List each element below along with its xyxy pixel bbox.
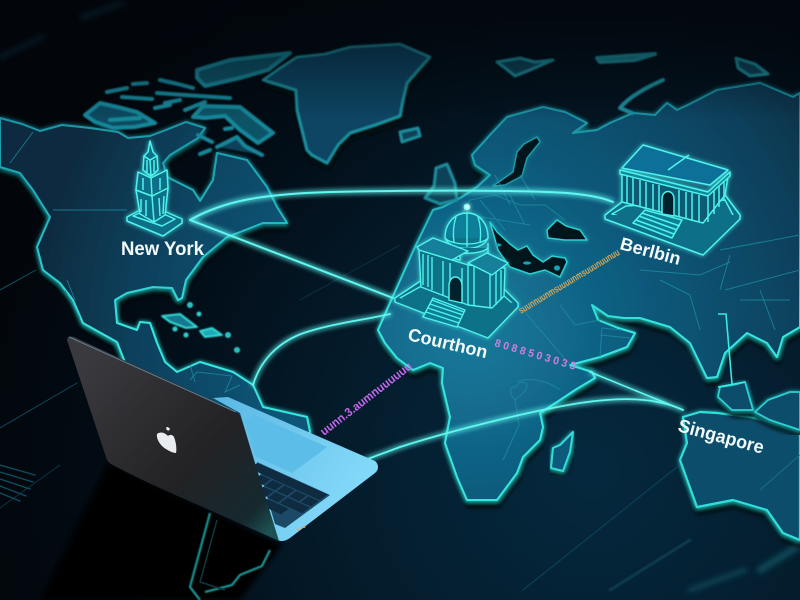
highlighted route: Southeast Asia marker lines: [718, 314, 745, 387]
laptop trackpad: [245, 415, 327, 473]
courthouse base: [395, 280, 518, 338]
building: New York tower: [127, 141, 182, 236]
continent: Africa and Eurasia: [378, 83, 800, 500]
islands: Caribbean: [162, 303, 239, 352]
label: Singapore: Singapore: [676, 415, 766, 458]
building: Berlin hall: [605, 145, 740, 255]
country borders: [0, 132, 800, 490]
top vignette: [0, 0, 800, 120]
laptop base: [213, 397, 378, 541]
icon: apple logo: [157, 427, 176, 453]
network connection lines: [190, 191, 683, 460]
laptop ports: [297, 526, 306, 530]
courthouse lantern: [464, 204, 470, 210]
label: New York: New York: [121, 239, 204, 260]
hall base: [605, 195, 740, 255]
laptop lid: [67, 336, 279, 541]
courthouse left wing roof: [417, 238, 468, 260]
laptop lid highlight edge: [69, 337, 236, 412]
courthouse dome: [445, 213, 488, 256]
data stream: orange: suunnuunmsuuuunmsuuunuunuu: [517, 247, 622, 317]
hall steps: [633, 210, 682, 238]
British Isles and northern islands: [400, 54, 768, 204]
seas cut into Eurasia: [490, 137, 587, 277]
data stream: purple right: 8 0 8 8 5 0 3 0 3 3: [493, 337, 577, 373]
courthouse steps: [423, 298, 465, 327]
continent: North America: [0, 118, 310, 470]
laptop: [67, 336, 378, 541]
courthouse body: [419, 250, 505, 308]
hall roof: [620, 145, 730, 196]
link: New York to Berlin: [190, 191, 613, 220]
label: Berlbin: Berlbin: [618, 234, 683, 269]
building: courthouse: [395, 204, 518, 338]
link: laptop to Singapore: [365, 399, 683, 460]
link: New York to courthouse: [190, 220, 393, 298]
hall body: [622, 172, 728, 223]
courthouse right wing roof: [468, 253, 508, 275]
island: Madagascar: [551, 432, 573, 471]
label: Courthon: Courthon: [406, 324, 490, 362]
laptop reflection on the dark floor: [40, 463, 282, 600]
continent: Greenland: [263, 44, 430, 163]
arctic islands: [85, 53, 290, 155]
data stream: purple lower: uunn.3.aumnuuuuuu: [317, 359, 415, 438]
link: South America to courthouse: [253, 314, 390, 385]
Mediterranean islands: [494, 243, 560, 271]
island: Australia: [680, 412, 800, 540]
laptop keyboard: [214, 462, 330, 528]
link: Horn of Africa to Singapore: [590, 372, 683, 410]
islands: Southeast Asia: [718, 382, 800, 430]
